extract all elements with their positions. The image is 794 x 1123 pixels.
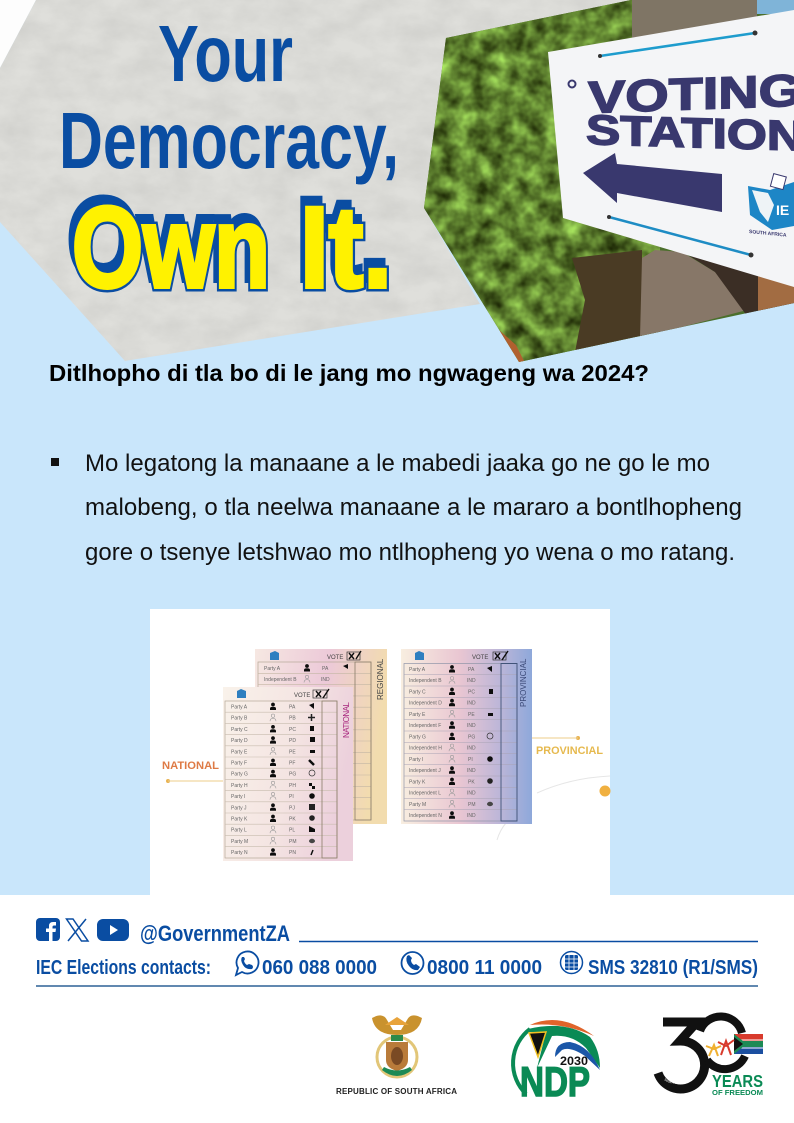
soil right: [758, 276, 794, 311]
contacts label: IEC Elections contacts:: [36, 957, 211, 979]
provincial ballot paper: Party I: [409, 757, 423, 763]
national ballot paper: PM: [289, 839, 296, 845]
provincial ballot paper: PA: [468, 667, 475, 673]
national ballot paper: PE: [289, 749, 296, 755]
NDP letters: NDP: [520, 1058, 590, 1105]
sign arrow: [583, 153, 722, 212]
NDP green sweep: [528, 1026, 600, 1068]
provincial ballot paper: IND: [467, 791, 476, 797]
sign heading VOTING: VOTING: [588, 65, 794, 123]
icon: X: [66, 919, 88, 941]
provincial ballot paper: Party M: [409, 802, 426, 808]
bullet marker: [51, 458, 59, 466]
NDP ring: [513, 1029, 530, 1094]
decorative gold dot: [600, 786, 610, 796]
sign strings: [600, 33, 755, 56]
sign IEC logo: SOUTH AFRICA: [749, 229, 787, 239]
sign icon: [568, 80, 576, 88]
provincial ballot paper: Party K: [409, 780, 426, 786]
national ballot paper: PC: [289, 727, 296, 733]
national ballot paper: PI: [289, 794, 294, 800]
national ballot paper: PG: [289, 772, 296, 778]
national ballot paper: NATIONAL: [342, 701, 351, 738]
provincial ballot paper: PC: [468, 690, 475, 696]
provincial ballot paper: Party E: [409, 712, 426, 718]
people figures: [706, 1040, 734, 1056]
social handle: @GovernmentZA: [140, 921, 290, 946]
national ballot paper: Party I: [231, 794, 245, 800]
provincial ballot paper: [401, 649, 532, 824]
OF FREEDOM: OF FREEDOM: [712, 1090, 763, 1097]
whatsapp number: 060 088 0000: [262, 957, 377, 979]
national ballot paper: Party E: [231, 749, 248, 755]
provincial ballot paper: Independent N: [409, 813, 442, 819]
provincial ballot paper: IND: [467, 723, 476, 729]
provincial ballot paper: Independent J: [409, 768, 441, 774]
provincial ballot paper: PK: [468, 780, 475, 786]
national ballot paper: Party N: [231, 850, 248, 856]
provincial ballot paper: PG: [468, 734, 475, 740]
bullet text block: gore o tsenye letshwao mo ntlhopheng yo wena o mo ratang.: [85, 539, 735, 566]
provincial ballot paper: Party C: [409, 690, 426, 696]
provincial ballot paper: Independent F: [409, 723, 441, 729]
title line: Your: Your: [158, 9, 293, 98]
title line: Own: Own: [72, 184, 270, 312]
national ballot paper: PD: [289, 738, 296, 744]
sky corner: [757, 0, 794, 14]
bullet text block: malobeng, o tla neelwa manaane a le mararo a bontlhopheng: [85, 494, 742, 521]
provincial ballot paper: Party G: [409, 734, 426, 740]
title line: Democracy,: Democracy,: [59, 96, 399, 185]
regional ballot paper: Independent B: [264, 677, 297, 683]
provincial ballot paper: Party A: [409, 667, 426, 673]
national ballot paper: PA: [289, 704, 296, 710]
national ballot paper: PK: [289, 816, 296, 822]
national ballot paper: Party L: [231, 828, 247, 834]
provincial callout: [532, 736, 603, 757]
national ballot paper: Party C: [231, 727, 248, 733]
provincial ballot paper: PROVINCIAL: [519, 658, 528, 707]
national ballot paper: Party A: [231, 704, 248, 710]
sign IEC logo: [748, 174, 794, 239]
title line: It.: It.: [297, 176, 389, 304]
sign heading STATION: STATION: [586, 106, 794, 160]
flag: [734, 1034, 763, 1054]
provincial ballot paper: PI: [468, 757, 473, 763]
regional ballot paper: Party A: [264, 666, 281, 672]
sign IEC logo: IE: [776, 202, 789, 218]
national ballot paper: PL: [289, 828, 295, 834]
national ballot paper: PF: [289, 760, 295, 766]
foliage: [420, 0, 660, 365]
bullet text block: [51, 450, 742, 566]
national ballot paper: Party G: [231, 772, 248, 778]
sms number: SMS 32810 (R1/SMS): [588, 957, 758, 979]
NDP year: 2030: [560, 1054, 588, 1068]
national ballot paper: Party D: [231, 738, 248, 744]
national ballot paper: PB: [289, 716, 296, 722]
regional ballot paper: [255, 649, 387, 824]
provincial ballot paper: IND: [467, 678, 476, 684]
regional ballot paper: IND: [321, 677, 330, 683]
provincial ballot paper: VOTE: [472, 655, 488, 661]
national ballot paper: Party F: [231, 760, 247, 766]
upper pole: [632, 0, 757, 38]
national ballot paper: [223, 687, 353, 861]
footer social row: [36, 918, 758, 946]
regional ballot paper: VOTE: [327, 655, 343, 661]
title line: Own: Own: [72, 184, 270, 312]
national ballot paper: Party B: [231, 716, 248, 722]
title line: Own: Own: [68, 176, 266, 304]
provincial ballot paper: IND: [467, 813, 476, 819]
provincial ballot paper: IND: [467, 701, 476, 707]
NDP flag triangle: [529, 1032, 546, 1057]
numeral 0 arcs: [700, 1016, 745, 1069]
provincial ballot paper: Independent H: [409, 746, 442, 752]
question heading: Ditlhopho di tla bo di le jang mo ngwageng wa 2024?: [49, 360, 649, 386]
regional ballot paper: PA: [322, 666, 329, 672]
provincial ballot paper: Independent B: [409, 678, 442, 684]
dark shade behind stone: [689, 256, 794, 314]
national ballot paper: PH: [289, 783, 296, 789]
title line: It.: It.: [300, 184, 392, 312]
provincial ballot paper: Independent D: [409, 701, 442, 707]
provincial ballot paper: IND: [467, 746, 476, 752]
coat of arms caption: REPUBLIC OF SOUTH AFRICA: [336, 1087, 457, 1096]
national ballot paper: PN: [289, 850, 296, 856]
national ballot paper: Party H: [231, 783, 248, 789]
page background: [0, 0, 794, 895]
provincial ballot paper: IND: [467, 768, 476, 774]
provincial ballot paper: PM: [468, 802, 476, 808]
YEARS: YEARS: [712, 1071, 763, 1091]
NDP orange arc: [530, 1020, 594, 1036]
NDP blue sweep: [555, 1042, 600, 1070]
regional ballot paper: REGIONAL: [376, 658, 385, 700]
ballot illustration panel: [150, 609, 610, 895]
icon: whatsapp: [236, 951, 259, 975]
provincial ballot paper: Independent L: [409, 791, 441, 797]
icon: keypad: [560, 952, 582, 974]
red soil: [499, 330, 524, 362]
dark undergrowth: [572, 250, 642, 352]
title: [59, 9, 399, 312]
provincial callout: PROVINCIAL: [536, 745, 603, 757]
lower pole stone: [640, 250, 747, 338]
logo: coat of arms: [336, 1015, 457, 1096]
national callout: [162, 760, 223, 783]
national callout: NATIONAL: [162, 760, 219, 772]
numeral 3 caption: South Africa 1994 - 2024: [664, 1078, 676, 1084]
icon: facebook: [36, 918, 60, 941]
title line: It.: It.: [300, 184, 392, 312]
icon: phone: [402, 952, 424, 974]
national ballot paper: VOTE: [294, 693, 310, 699]
voting station sign: [548, 10, 794, 287]
logo: NDP 2030: [513, 1020, 600, 1105]
numeral 3: [658, 1022, 705, 1089]
phone number: 0800 11 0000: [427, 957, 542, 979]
icon: youtube: [97, 919, 129, 941]
national ballot paper: Party M: [231, 839, 248, 845]
logo: 30 years of freedom: [654, 1012, 763, 1097]
provincial ballot paper: PE: [468, 712, 475, 718]
national ballot paper: Party K: [231, 816, 248, 822]
hero: concrete panel: [0, 0, 640, 365]
national ballot paper: Party J: [231, 805, 247, 811]
bullet text block: Mo legatong la manaane a le mabedi jaaka go ne go le mo: [85, 450, 710, 477]
national ballot paper: PJ: [289, 805, 295, 811]
footer contacts row: [36, 951, 758, 986]
hero: voting station photo: [420, 0, 794, 365]
